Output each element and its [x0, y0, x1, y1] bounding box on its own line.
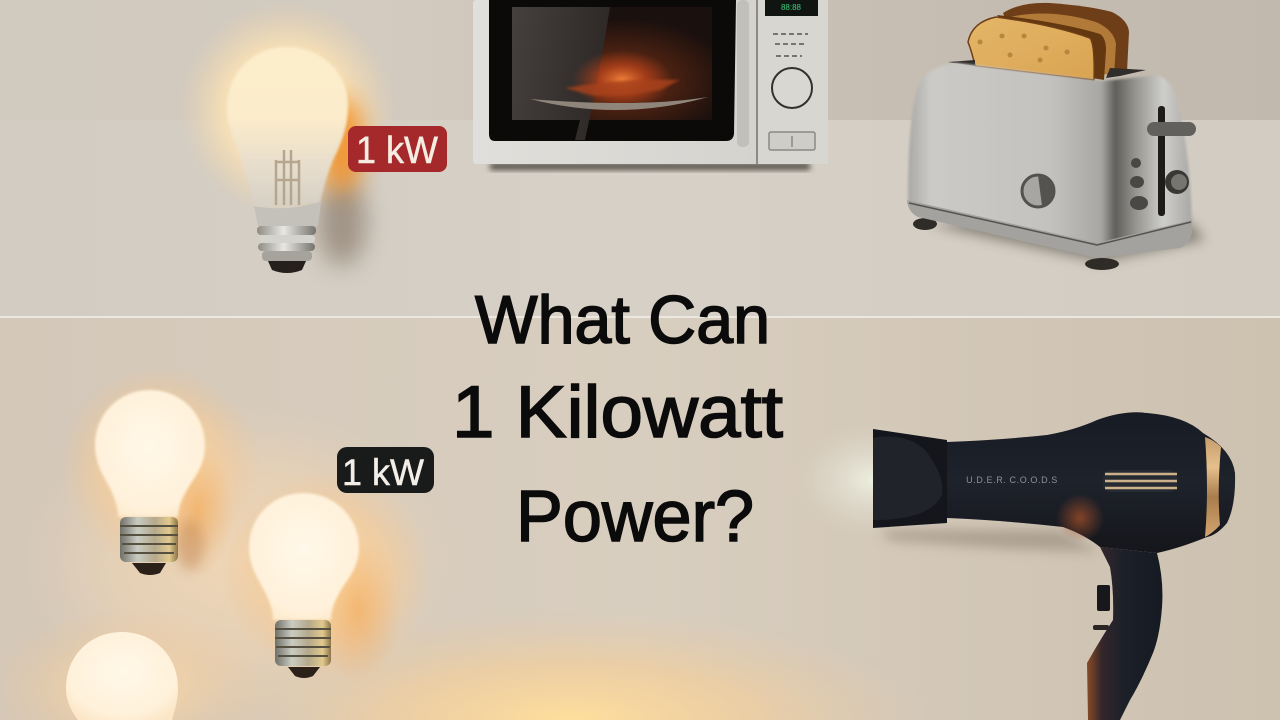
icon: microwave oven: 88:88 [781, 3, 802, 12]
icon: hair dryer [793, 412, 1235, 720]
lower scene background [0, 318, 1280, 720]
icon: glowing bulb middle left [60, 365, 260, 575]
icon: glowing bulb centre [220, 470, 430, 685]
icon: toaster with bread [907, 3, 1205, 270]
icon: microwave oven [473, 0, 828, 170]
icon: large light bulb upper left [179, 2, 395, 273]
badge: 1 kW red: 1 kW [356, 130, 438, 172]
title: Power? [516, 477, 754, 557]
title: 1 Kilowatt [452, 372, 783, 453]
title [452, 282, 783, 557]
badge: 1 kW dark: 1 kW [342, 452, 424, 493]
title: What Can [475, 282, 770, 358]
icon: hair dryer: U.D.E.R. C.O.O.D.S [966, 475, 1058, 485]
divider line [0, 316, 1280, 318]
icon: partly cropped bulb bottom left [0, 560, 290, 720]
upper scene background [0, 0, 1280, 317]
